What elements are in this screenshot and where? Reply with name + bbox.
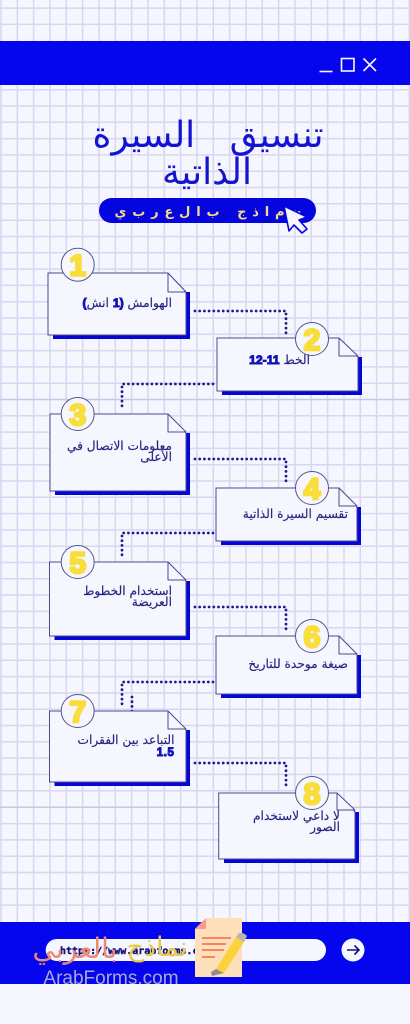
url pill: [46, 939, 326, 961]
panel: step 8: [219, 776, 359, 863]
badge: 6: [296, 620, 328, 654]
panel: step 1: [48, 248, 190, 339]
subtitle pill: ن م ا ذ ج ب ا ل ع ر ب ي: [114, 205, 302, 220]
text: step 8: الصور: [309, 820, 340, 835]
badge: 4: [296, 472, 328, 506]
text: step 7: [78, 733, 174, 759]
badge: 4: 4: [304, 473, 321, 506]
icon: document and pencil: [195, 918, 247, 977]
text: step 5: [83, 584, 172, 610]
text: step 7: 1.5: [157, 747, 174, 759]
text: step 8: [253, 809, 340, 835]
connector: 5 to 6: [195, 607, 286, 632]
badge: 2: [296, 322, 328, 357]
icon: window controls: [320, 58, 376, 72]
panel: step 4: [216, 472, 361, 545]
text: step 2: الخط 11-12: [249, 353, 310, 367]
text: step 6: صيغة موحدة للتاريخ: [248, 657, 348, 672]
panel: step 5: [50, 546, 190, 640]
badge: 5: [61, 546, 94, 580]
watermark: نماذج: [127, 932, 187, 963]
title: الذاتية: [162, 152, 252, 193]
connector: 3 to 4: [195, 459, 286, 484]
text: step 8: لا داعي لاستخدام: [253, 809, 340, 823]
watermark: بالعربي: [33, 932, 117, 965]
badge: 8: 8: [304, 778, 320, 811]
icon: cursor arrow: [284, 206, 307, 233]
badge: 7: 7: [69, 696, 86, 729]
connector: 6 to 7: [122, 682, 213, 716]
text: step 3: الأعلى: [140, 449, 172, 464]
badge: 5: 5: [69, 547, 86, 580]
text: step 3: [67, 439, 172, 464]
watermark: ArabForms.com: [43, 968, 179, 989]
connector: 7 to 8: [195, 763, 286, 788]
url pill: https://www.arabforms.com: [60, 946, 211, 957]
panel: step 3: [50, 398, 190, 495]
title: تنسيق السيرة: [92, 115, 324, 156]
panel: step 6: [216, 620, 361, 698]
connector: 1 to 2: [195, 311, 286, 336]
top window bar: [0, 41, 410, 85]
badge: 3: 3: [69, 399, 86, 432]
panel: step 2: [217, 322, 362, 395]
connector: 4 to 5: [122, 533, 213, 558]
watermark: [33, 932, 187, 989]
connector: 2 to 3: [122, 384, 213, 409]
badge: 1: [61, 248, 94, 282]
badge: 6: 6: [304, 621, 320, 654]
text: step 3: معلومات الاتصال في: [67, 439, 172, 454]
title: [92, 115, 324, 193]
badge: 2: 2: [304, 324, 320, 357]
text: step 7: التباعد بين الفقرات: [78, 733, 174, 748]
footer bar: [0, 922, 410, 984]
text: step 5: استخدام الخطوط: [83, 584, 172, 599]
badge: 1: 1: [69, 250, 86, 282]
subtitle pill: [99, 198, 316, 223]
panel: step 7: [50, 694, 190, 786]
badge: 8: [296, 776, 328, 811]
text: step 4: تقسيم السيرة الذاتية: [243, 507, 348, 522]
text: step 5: العريضة: [132, 595, 172, 610]
badge: 7: [61, 694, 94, 729]
text: step 1: الهوامش (1 انش): [83, 296, 172, 311]
icon: arrow button: [342, 938, 364, 962]
